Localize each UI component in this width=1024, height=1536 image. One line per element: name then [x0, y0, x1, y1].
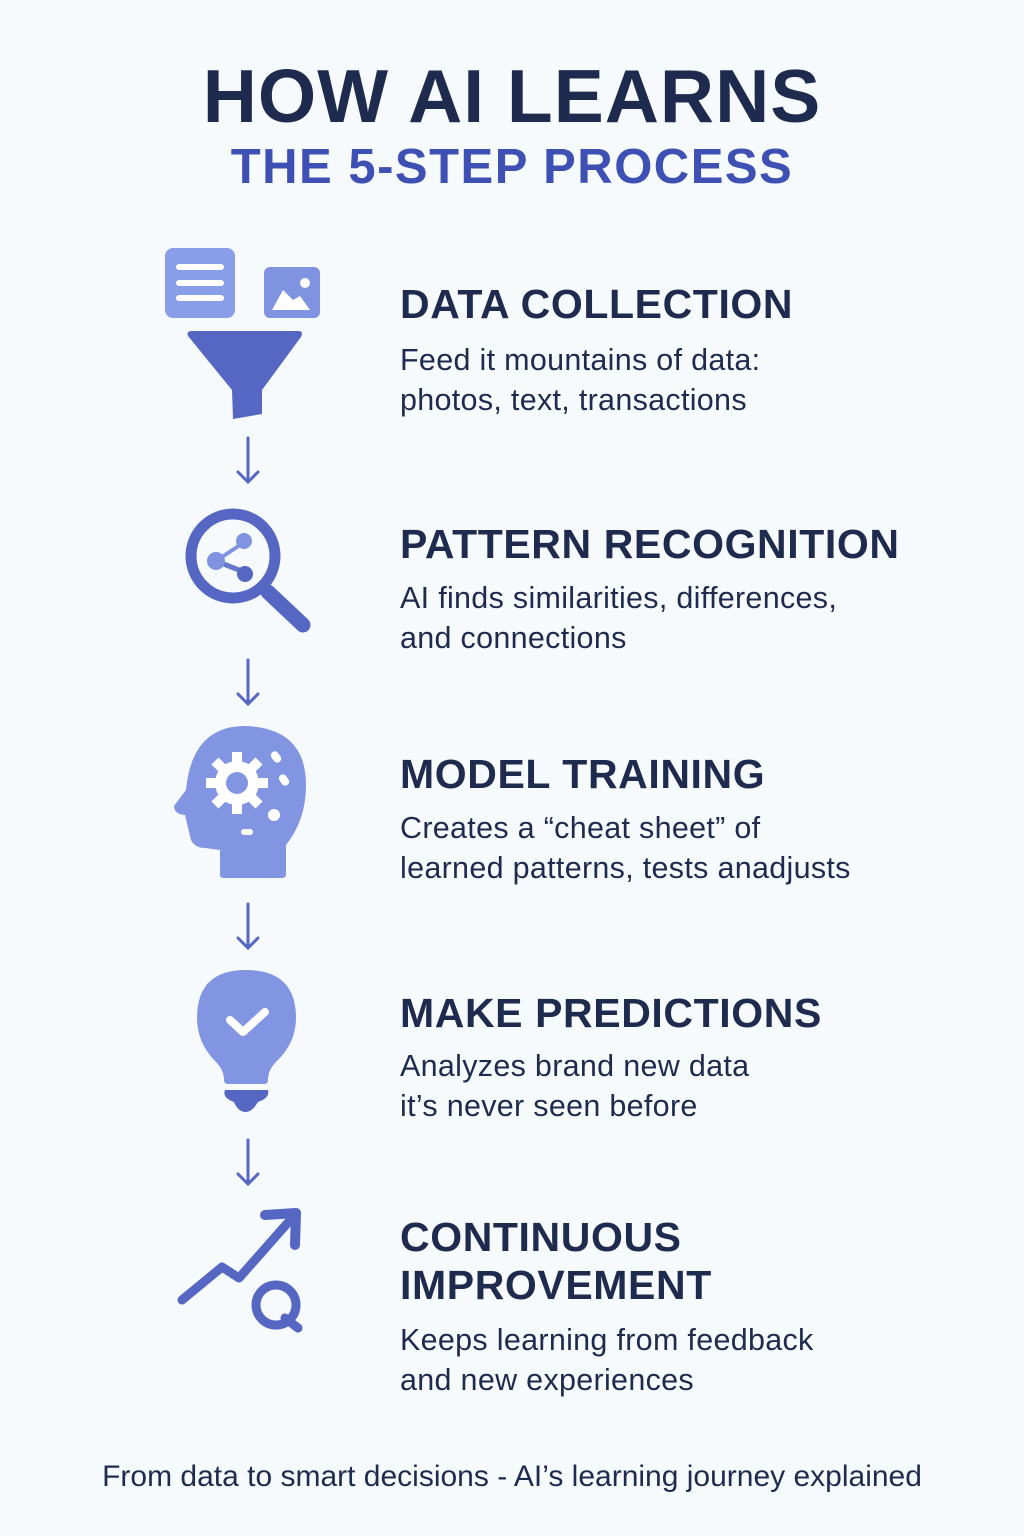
body 5: and new experiences [400, 1363, 694, 1397]
body 5: Keeps learning from feedback [400, 1323, 814, 1357]
body 4: Analyzes brand new data [400, 1049, 749, 1083]
heading: continuous improvement: IMPROVEMENT [400, 1262, 712, 1308]
step 2 text [400, 521, 900, 655]
body 4 [400, 1049, 750, 1123]
footer: From data to smart decisions - AI’s learning journey explained [102, 1460, 922, 1493]
subtitle: THE 5-STEP PROCESS [231, 140, 793, 194]
body 2: AI finds similarities, differences, [400, 581, 837, 615]
heading: model training: MODEL TRAINING [400, 751, 765, 797]
arrow 4 [236, 1138, 260, 1186]
icon: head with gear [174, 726, 306, 878]
body 3: learned patterns, tests anadjusts [400, 851, 851, 885]
icon: magnifier [186, 508, 310, 632]
heading: continuous improvement: CONTINUOUS [400, 1214, 682, 1260]
arrow 3 [236, 902, 260, 950]
body 1: photos, text, transactions [400, 383, 747, 417]
body 2: and connections [400, 621, 627, 655]
step 4 text [400, 990, 822, 1123]
heading: pattern recognition: PATTERN RECOGNITION [400, 521, 900, 567]
body 2 [400, 581, 837, 655]
step 1 text [400, 281, 793, 417]
step 3 text [400, 751, 851, 885]
body 1 [400, 343, 760, 417]
heading: make predictions: MAKE PREDICTIONS [400, 990, 822, 1036]
icon: data funnel [165, 248, 320, 419]
arrow 1 [236, 436, 260, 484]
icon: growth chart [178, 1208, 302, 1332]
body 4: it’s never seen before [400, 1089, 698, 1123]
heading: continuous improvement [400, 1214, 712, 1308]
heading: data collection: DATA COLLECTION [400, 281, 793, 327]
body 3 [400, 811, 851, 885]
step 5 text [400, 1214, 814, 1397]
icon: lightbulb check [197, 970, 296, 1112]
body 1: Feed it mountains of data: [400, 343, 760, 377]
body 3: Creates a “cheat sheet” of [400, 811, 760, 845]
body 5 [400, 1323, 814, 1397]
title: HOW AI LEARNS [203, 54, 821, 138]
arrow 2 [236, 658, 260, 706]
